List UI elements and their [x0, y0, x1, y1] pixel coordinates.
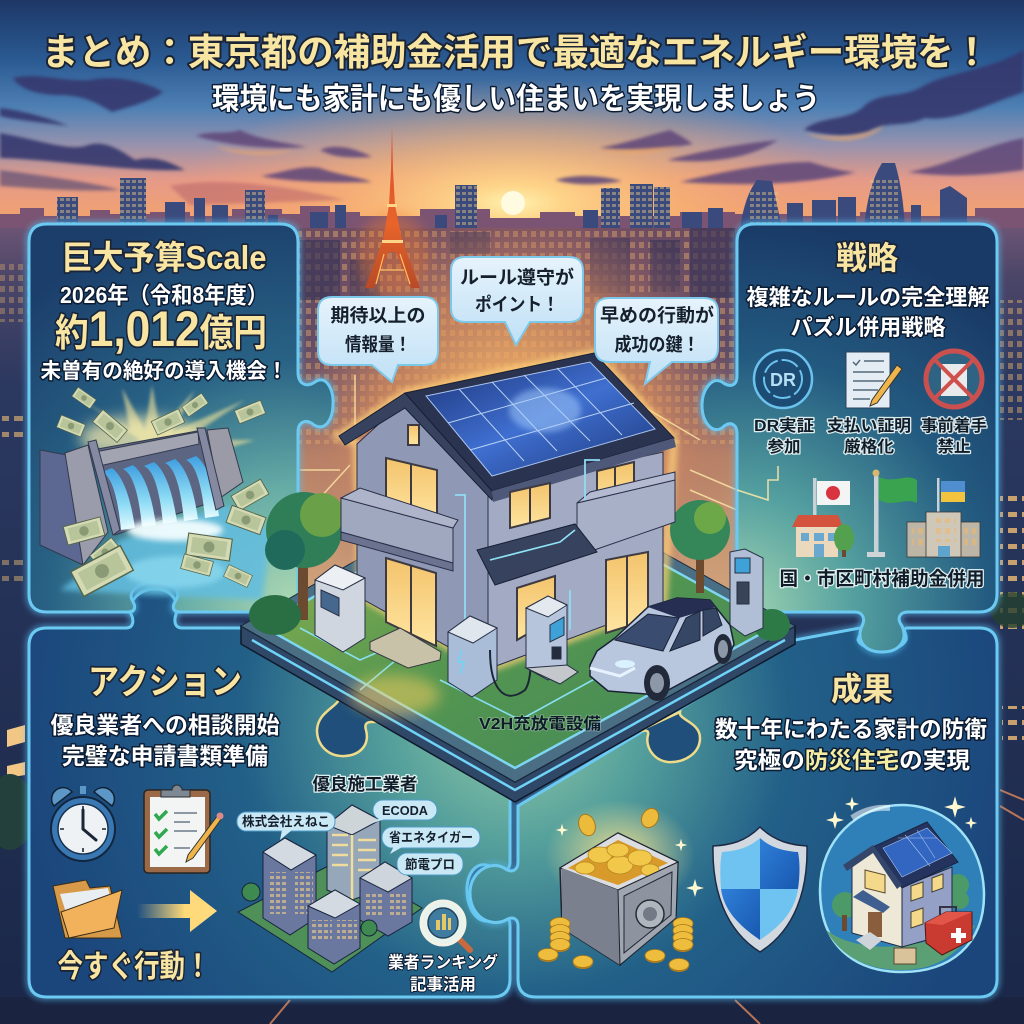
- label: ranking article: [388, 952, 498, 994]
- icon: document and pencil: [846, 352, 902, 408]
- heading: budget scale: 巨大予算Scale: [62, 239, 266, 276]
- panel: budget scale (top left): [29, 224, 333, 612]
- text: results lines: 究極の防災住宅の実現: [734, 747, 970, 773]
- callout: early action: 成功の鍵！: [614, 334, 700, 355]
- background: skyline: [0, 163, 1024, 245]
- text: action lines: 優良業者への相談開始: [50, 712, 280, 738]
- power lines: [455, 460, 600, 630]
- icon: national municipal flags and buildings: [792, 470, 980, 557]
- heading: results: 成果: [831, 671, 893, 707]
- text: act now: 今すぐ行動！: [58, 949, 210, 984]
- text: results lines: [715, 716, 987, 773]
- platform knob: right: [630, 712, 700, 762]
- text: results lines: 数十年にわたる家計の防衛: [715, 716, 987, 742]
- label: ranking article: 業者ランキング: [388, 952, 498, 972]
- illustration: energy house: [249, 353, 790, 701]
- icon: house in protective dome: [820, 796, 984, 972]
- callouts: company names: 節電プロ: [405, 857, 455, 872]
- callouts: company names: 株式会社えねこ: [242, 814, 330, 829]
- icon: alarm clock: [51, 786, 115, 861]
- callout: information: [318, 297, 438, 382]
- labels: strategy icons: 支払い証明: [827, 416, 911, 435]
- storage battery: [315, 565, 365, 652]
- panel: action (bottom left): [29, 589, 510, 997]
- callouts: company names: 省エネタイガー: [389, 830, 473, 845]
- label: ranking article: 記事活用: [410, 975, 476, 994]
- roof: [339, 353, 676, 502]
- text: strategy lines: 複雑なルールの完全理解: [746, 285, 990, 310]
- text: action lines: 完璧な申請書類準備: [62, 743, 268, 769]
- heading: strategy: 戦略: [836, 240, 898, 276]
- right balcony: [577, 472, 675, 556]
- platform base: [241, 470, 795, 802]
- icon: shield: [713, 827, 807, 952]
- illustration: office buildings: [238, 805, 422, 972]
- callout: rule compliance: ポイント！: [475, 294, 559, 315]
- text: strategy lines: [746, 285, 990, 340]
- label: combined subsidies: 国・市区町村補助金併用: [780, 568, 984, 590]
- labels: strategy icons: 厳格化: [844, 437, 894, 456]
- labels: strategy icons: [754, 416, 987, 456]
- title: まとめ：東京都の補助金活用で最適なエネルギー環境を！: [42, 32, 990, 73]
- panel: results (bottom right): [470, 628, 997, 997]
- subtitle: 環境にも家計にも優しい住まいを実現しましょう: [212, 83, 820, 116]
- left balcony: [341, 488, 458, 571]
- text: opportunity: 未曽有の絶好の導入機会！: [40, 360, 288, 383]
- icon: magnifier: [421, 901, 470, 950]
- callout: information: 情報量！: [345, 334, 411, 355]
- charger: [526, 596, 578, 684]
- icon: DR cycle: [754, 350, 812, 408]
- callout: information: 期待以上の: [330, 305, 426, 326]
- text: action lines: [50, 712, 280, 769]
- heading: action: アクション: [88, 663, 242, 702]
- icon: DR cycle: DR: [770, 370, 796, 390]
- arrow: [137, 890, 217, 932]
- callout: early action: 早めの行動が: [600, 305, 714, 326]
- electric car: [590, 598, 734, 701]
- text: budget amount: 約1,012億円: [55, 301, 267, 357]
- background: sunset sky: [0, 0, 1024, 328]
- illustration: dam with money: [40, 385, 272, 600]
- callouts: company names: [237, 800, 480, 875]
- icon: prohibited: [926, 351, 982, 407]
- icon: Tokyo Tower: [357, 127, 429, 297]
- windows: [386, 425, 648, 646]
- platform knob: left: [317, 698, 380, 756]
- background: night city: [0, 228, 1024, 1024]
- labels: strategy icons: DR実証: [754, 417, 814, 435]
- right tree: [670, 500, 790, 641]
- text: fiscal year: 2026年（令和8年度）: [60, 282, 268, 308]
- panel: strategy (top right): [702, 224, 997, 652]
- icon: safe with coins: [538, 800, 704, 972]
- far charger: [730, 549, 763, 636]
- label: V2H equipment: V2H充放電設備: [479, 715, 601, 733]
- text: strategy lines: パズル併用戦略: [790, 315, 946, 340]
- label: contractors: 優良施工業者: [312, 775, 418, 794]
- callout: rule compliance: [451, 257, 583, 345]
- V2H unit: [448, 616, 532, 697]
- labels: strategy icons: 禁止: [938, 438, 970, 456]
- steps: [370, 628, 441, 668]
- callout: rule compliance: ルール遵守が: [460, 267, 574, 288]
- callouts: company names: ECODA: [382, 803, 429, 818]
- labels: strategy icons: 参加: [768, 438, 800, 456]
- left tree: [249, 492, 344, 635]
- house walls: [357, 400, 488, 669]
- awning: [477, 524, 597, 585]
- icon: folder: [53, 880, 122, 938]
- labels: strategy icons: 事前着手: [921, 416, 987, 435]
- callout: early action: [595, 298, 718, 384]
- icon: clipboard checklist: [144, 785, 224, 873]
- glowing circuit line: [737, 466, 778, 500]
